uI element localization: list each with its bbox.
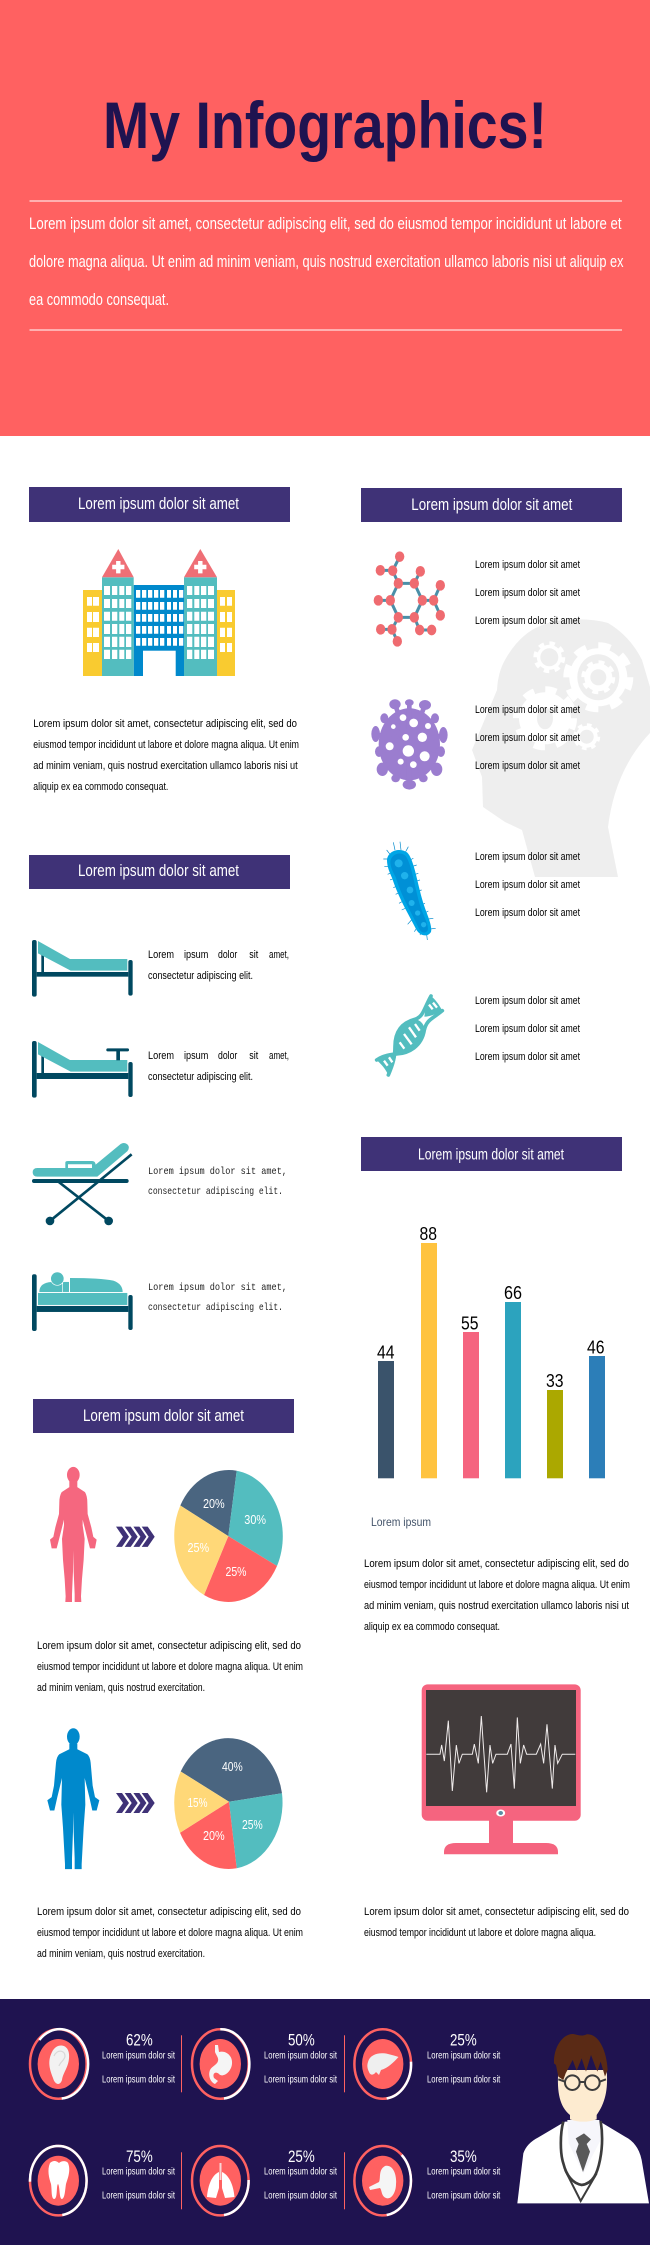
icon: hospital building xyxy=(83,549,235,676)
pie chart 2: 25% xyxy=(242,1817,263,1832)
text: bacterium labels: Lorem ipsum dolor sit amet xyxy=(475,879,580,891)
stat: tooth 75%: 75% xyxy=(126,2147,153,2166)
pie chart 1: 25% xyxy=(226,1564,247,1579)
icon: male body silhouette xyxy=(47,1728,99,1869)
heading: body statistics section: Lorem ipsum dolor sit amet xyxy=(83,1406,244,1425)
stat: tooth 75% xyxy=(30,2146,182,2215)
text: bed 1 caption: amet, xyxy=(269,949,289,961)
icon: hospital bed xyxy=(32,940,133,997)
text block: pie 1 description: ad minim veniam, quis nostrud exercitation. xyxy=(37,1682,205,1694)
text: molecule labels xyxy=(475,559,580,627)
icon: hospital bed with tray xyxy=(32,1041,133,1098)
text block: pie 2 description: Lorem ipsum dolor sit amet, consectetur adipiscing elit, sed do xyxy=(37,1906,301,1918)
stat: ear 62%: 62% xyxy=(126,2030,153,2050)
icon: arrows to pie 1 xyxy=(116,1527,155,1547)
pie chart 1 xyxy=(174,1470,283,1602)
heading: molecules section: Lorem ipsum dolor sit amet xyxy=(411,495,573,514)
text: stretcher caption: Lorem ipsum dolor sit amet, xyxy=(148,1166,287,1178)
text: virus labels: Lorem ipsum dolor sit amet xyxy=(475,732,580,744)
stat: kidney 35%: Lorem ipsum dolor sit xyxy=(427,2166,500,2178)
text: bed 2 caption: dolor xyxy=(218,1050,238,1062)
text: virus labels xyxy=(475,704,580,772)
heading: bar chart section: Lorem ipsum dolor sit amet xyxy=(418,1146,564,1164)
text: bed 1 caption: ipsum xyxy=(184,949,208,961)
text: patient bed caption: consectetur adipiscing elit. xyxy=(148,1302,283,1314)
text block: chart description xyxy=(364,1558,630,1633)
text block: hospital description: aliquip ex ea commodo consequat. xyxy=(33,781,168,793)
text: bed 2 caption: Lorem xyxy=(148,1050,174,1062)
text: patient bed caption xyxy=(148,1282,287,1314)
illustration: head silhouette with gears xyxy=(472,619,650,877)
stat: kidney 35% xyxy=(354,2146,500,2215)
stat: lungs 25%: Lorem ipsum dolor sit xyxy=(264,2190,337,2202)
stat: lungs 25%: Lorem ipsum dolor sit xyxy=(264,2166,337,2178)
text: molecule labels: Lorem ipsum dolor sit amet xyxy=(475,559,580,571)
text: patient bed caption: Lorem ipsum dolor sit amet, xyxy=(148,1282,287,1294)
text: bed 2 caption: consectetur adipiscing elit. xyxy=(148,1071,253,1083)
stat: ear 62%: Lorem ipsum dolor sit xyxy=(102,2074,175,2086)
stat: liver 25% xyxy=(354,2029,500,2099)
text: stretcher caption xyxy=(148,1166,287,1198)
text: DNA labels: Lorem ipsum dolor sit amet xyxy=(475,1051,580,1063)
pie chart 1: 20% xyxy=(203,1496,225,1511)
stat: liver 25%: Lorem ipsum dolor sit xyxy=(427,2074,500,2086)
heading: beds section: Lorem ipsum dolor sit amet xyxy=(78,861,239,880)
text block: pie 1 description: eiusmod tempor incididunt ut labore et dolore magna aliqua. Ut enim xyxy=(37,1661,303,1673)
stat: ear 62% xyxy=(30,2029,182,2099)
pie chart 2: 40% xyxy=(222,1759,243,1774)
pie chart 2 xyxy=(174,1738,283,1869)
text block: pie 2 description: ad minim veniam, quis nostrud exercitation. xyxy=(37,1948,205,1960)
stat: tooth 75%: Lorem ipsum dolor sit xyxy=(102,2190,175,2202)
icon: female body silhouette xyxy=(50,1467,97,1602)
pie chart 1: 30% xyxy=(244,1512,266,1527)
stat: ear 62%: Lorem ipsum dolor sit xyxy=(102,2050,175,2062)
text: molecule labels: Lorem ipsum dolor sit amet xyxy=(475,587,580,599)
heading: hospital section xyxy=(29,487,290,522)
text block: pie 2 description: eiusmod tempor incididunt ut labore et dolore magna aliqua. Ut enim xyxy=(37,1927,303,1939)
chart legend: Lorem ipsum xyxy=(371,1515,431,1529)
heading: hospital section: Lorem ipsum dolor sit amet xyxy=(78,494,239,513)
text: stretcher caption: consectetur adipiscing elit. xyxy=(148,1186,283,1198)
text block: hospital description: Lorem ipsum dolor sit amet, consectetur adipiscing elit, sed do xyxy=(33,718,297,730)
bar chart xyxy=(377,1223,605,1478)
text block: monitor description xyxy=(364,1906,629,1939)
stat: stomach 50%: Lorem ipsum dolor sit xyxy=(264,2050,337,2062)
stat: lungs 25%: 25% xyxy=(288,2147,315,2166)
text: bed 1 caption: consectetur adipiscing elit. xyxy=(148,970,253,982)
text: bacterium labels xyxy=(475,851,580,919)
icon: DNA helix xyxy=(377,996,442,1075)
title: My Infographics! xyxy=(103,88,547,162)
stat: kidney 35%: 35% xyxy=(450,2147,477,2166)
stat: stomach 50%: 50% xyxy=(288,2030,315,2050)
ECG line xyxy=(426,1716,575,1792)
text: bacterium labels: Lorem ipsum dolor sit amet xyxy=(475,907,580,919)
text block: chart description: aliquip ex ea commodo consequat. xyxy=(364,1621,500,1633)
text: bed 1 caption: Lorem xyxy=(148,949,174,961)
stat: lungs 25% xyxy=(192,2146,345,2215)
bar chart: 46 xyxy=(587,1336,604,1358)
bar chart: 88 xyxy=(420,1223,437,1244)
text: bed 2 caption: ipsum xyxy=(184,1050,208,1062)
pie chart 1: 25% xyxy=(188,1540,210,1555)
text: bed 1 caption: dolor xyxy=(218,949,238,961)
bar chart: 33 xyxy=(546,1370,564,1391)
text: DNA labels xyxy=(475,995,580,1063)
text: virus labels: Lorem ipsum dolor sit amet xyxy=(475,704,580,716)
text: bed 2 caption: amet, xyxy=(269,1050,289,1062)
icon: arrows to pie 2 xyxy=(116,1793,155,1813)
stat: liver 25%: 25% xyxy=(450,2030,477,2050)
stat: liver 25%: Lorem ipsum dolor sit xyxy=(427,2050,500,2062)
bar chart: 55 xyxy=(461,1312,478,1334)
pie chart 2: 15% xyxy=(188,1795,208,1810)
panel: organ statistics footer xyxy=(0,1999,650,2245)
text: virus labels: Lorem ipsum dolor sit amet xyxy=(475,760,580,772)
bar chart: 44 xyxy=(377,1342,394,1362)
heading: molecules section xyxy=(361,488,622,522)
icon: stretcher xyxy=(32,1143,132,1225)
text: DNA labels: Lorem ipsum dolor sit amet xyxy=(475,995,580,1007)
text: bed 2 caption xyxy=(148,1050,289,1083)
pie chart 2: 20% xyxy=(203,1828,225,1843)
heading: beds section xyxy=(29,855,290,889)
text: DNA labels: Lorem ipsum dolor sit amet xyxy=(475,1023,580,1035)
heading: body statistics section xyxy=(33,1399,294,1433)
text: bed 1 caption xyxy=(148,949,289,982)
text block: monitor description: eiusmod tempor incididunt ut labore et dolore magna aliqua. xyxy=(364,1927,596,1939)
intro text: ea commodo consequat. xyxy=(29,290,169,309)
heading: bar chart section xyxy=(361,1137,622,1171)
stat: tooth 75%: Lorem ipsum dolor sit xyxy=(102,2166,175,2178)
bar chart: 66 xyxy=(504,1282,522,1303)
text: molecule labels: Lorem ipsum dolor sit amet xyxy=(475,615,580,627)
icon: virus xyxy=(371,699,448,790)
stat: stomach 50%: Lorem ipsum dolor sit xyxy=(264,2074,337,2086)
text block: hospital description xyxy=(33,718,299,793)
text block: pie 2 description xyxy=(37,1906,303,1960)
text block: pie 1 description xyxy=(37,1640,303,1694)
text block: hospital description: eiusmod tempor incididunt ut labore et dolore magna aliqua. Ut enim xyxy=(33,739,299,751)
icon: patient lying in bed xyxy=(32,1272,133,1331)
text: bacterium labels: Lorem ipsum dolor sit amet xyxy=(475,851,580,863)
stat: stomach 50% xyxy=(192,2029,345,2099)
text block: hospital description: ad minim veniam, quis nostrud exercitation ullamco laboris nisi ut xyxy=(33,760,298,772)
icon: molecule xyxy=(374,551,445,647)
illustration: doctor xyxy=(517,2034,649,2203)
panel: header banner xyxy=(0,0,650,436)
stat: kidney 35%: Lorem ipsum dolor sit xyxy=(427,2190,500,2202)
icon: bacterium xyxy=(383,842,436,940)
text: bed 1 caption: sit xyxy=(249,949,258,961)
text: bed 2 caption: sit xyxy=(249,1050,258,1062)
icon: heart monitor xyxy=(422,1684,581,1854)
text block: pie 1 description: Lorem ipsum dolor sit amet, consectetur adipiscing elit, sed do xyxy=(37,1640,301,1652)
intro text xyxy=(29,214,624,309)
